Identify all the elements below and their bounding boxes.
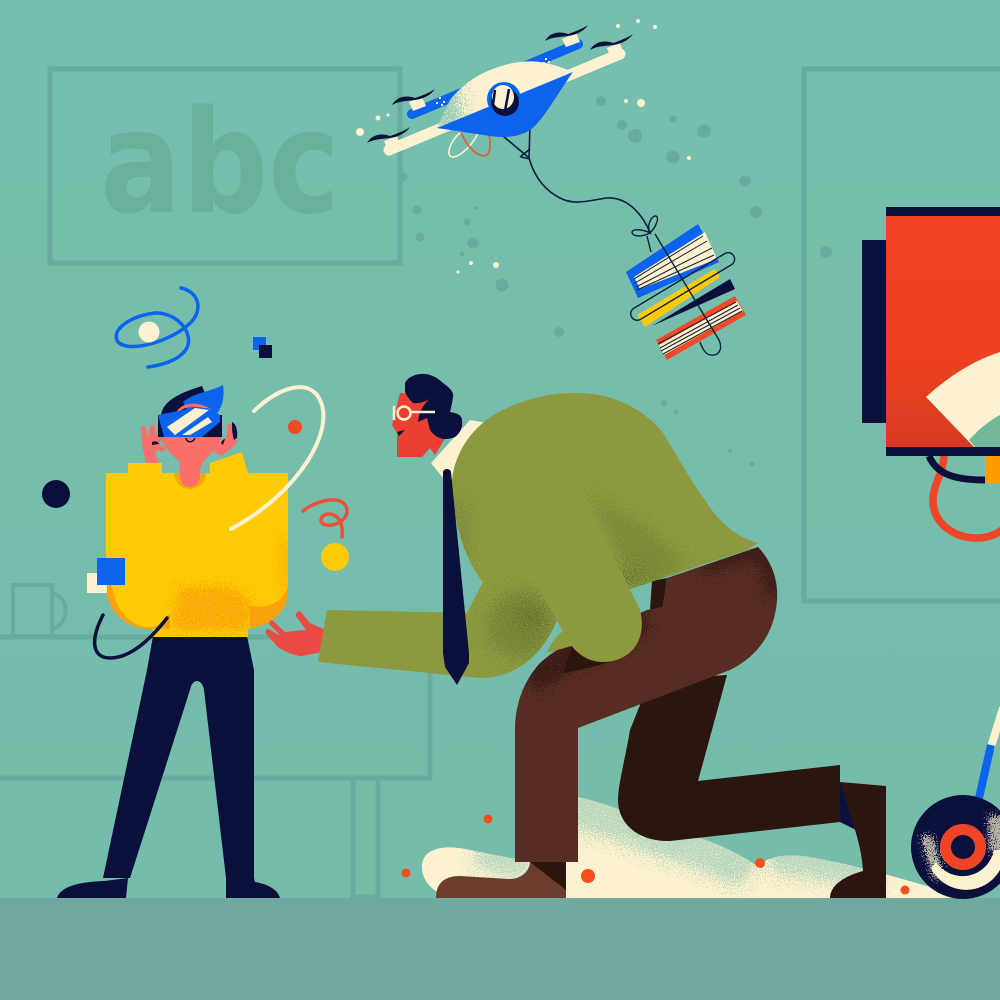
drone bbox=[367, 25, 650, 232]
orbit line bbox=[116, 288, 198, 367]
background speckles bbox=[398, 96, 832, 467]
hair blue bbox=[183, 385, 224, 416]
green wedge bbox=[969, 415, 1000, 447]
red dot bbox=[288, 420, 302, 434]
smile bbox=[186, 438, 195, 442]
trousers bbox=[103, 636, 254, 878]
yellow book bbox=[637, 269, 720, 327]
wheel stem bbox=[979, 708, 1000, 798]
camera lens bbox=[492, 85, 514, 109]
side panel bbox=[862, 240, 886, 423]
top bar bbox=[886, 207, 1000, 216]
VR boy bbox=[57, 385, 292, 898]
camera ring bbox=[487, 82, 521, 116]
hip strip bbox=[650, 578, 667, 610]
cream specks on blue arm bbox=[436, 58, 550, 106]
wheel hub bbox=[946, 830, 980, 864]
wheel cream grain bbox=[921, 816, 1000, 878]
visor stripes bbox=[167, 408, 212, 435]
shirt bbox=[106, 452, 288, 627]
red book bbox=[656, 296, 746, 360]
VR headset bbox=[158, 415, 222, 437]
front shoe bbox=[436, 862, 566, 898]
floor bbox=[0, 898, 1000, 1000]
shirt hem and centre bbox=[153, 575, 250, 637]
drone loops bbox=[449, 132, 490, 157]
mouth bbox=[397, 430, 405, 436]
front trousers bbox=[515, 547, 777, 862]
back foot bbox=[830, 782, 886, 898]
floating eye scribble bbox=[116, 288, 198, 367]
drone string and knots bbox=[503, 125, 650, 232]
back sock bbox=[840, 782, 856, 830]
board text: abc: abc bbox=[100, 79, 340, 246]
face bbox=[392, 393, 450, 457]
bow bbox=[632, 216, 657, 236]
red book lines bbox=[658, 302, 742, 354]
wheel cream crescent bbox=[931, 850, 1000, 890]
page lines bbox=[634, 236, 714, 290]
wheel bbox=[911, 795, 1000, 899]
horizontal string loop bbox=[628, 250, 737, 323]
shirt collar bbox=[431, 420, 487, 480]
red scribble bbox=[303, 500, 347, 537]
orange box bbox=[985, 456, 1000, 484]
sweater torso and forearm bbox=[318, 393, 758, 678]
front arm bbox=[389, 54, 620, 150]
navy book bbox=[652, 279, 735, 326]
rear arm bbox=[412, 44, 578, 114]
eye ball bbox=[138, 322, 160, 342]
cream sand mound bbox=[422, 797, 965, 898]
shirt orange underlay bbox=[106, 560, 288, 629]
back leg bbox=[618, 675, 840, 841]
navy cable bbox=[929, 456, 985, 480]
collar bbox=[174, 473, 206, 489]
sweater grain bbox=[452, 490, 690, 659]
pink headband bbox=[177, 404, 211, 411]
motors bbox=[384, 33, 624, 152]
blue book bbox=[626, 224, 719, 298]
hair bbox=[405, 374, 462, 439]
right hand bbox=[214, 424, 237, 456]
bottom bar bbox=[886, 447, 1000, 456]
drone body blue bbox=[437, 72, 573, 137]
red book pages bbox=[659, 301, 743, 355]
right shoe bbox=[226, 878, 280, 898]
shirt grain bbox=[172, 540, 292, 630]
visor bbox=[158, 408, 220, 437]
bent man bbox=[266, 374, 886, 898]
yellow dot bbox=[321, 543, 349, 571]
desk outline bbox=[0, 637, 430, 897]
tie bbox=[443, 469, 469, 685]
screen bbox=[886, 215, 1000, 448]
cream wedge bbox=[926, 352, 1000, 447]
cream body teal grain bbox=[430, 80, 462, 130]
floating pixels bbox=[253, 337, 272, 358]
lens bars bbox=[493, 89, 509, 111]
trousers grain bbox=[530, 548, 773, 680]
cable bbox=[95, 615, 167, 658]
vertical string strands bbox=[647, 234, 721, 355]
cream speckles bbox=[356, 19, 691, 274]
front shoe dark bbox=[530, 862, 566, 898]
pages bbox=[634, 232, 717, 289]
sweater sliver bbox=[547, 628, 575, 653]
stack of books tied with string bbox=[626, 216, 746, 360]
left shoe bbox=[57, 878, 128, 898]
navy dot bbox=[42, 480, 70, 508]
orange dots bbox=[402, 814, 910, 894]
sweater arm bbox=[490, 470, 642, 662]
glasses bbox=[394, 406, 435, 420]
hair dark bbox=[161, 386, 214, 415]
cream arc line bbox=[231, 387, 323, 529]
neck and chin bbox=[160, 436, 222, 487]
finger shadows bbox=[152, 422, 237, 445]
left hand bbox=[141, 425, 165, 463]
cream and blue squares bbox=[87, 558, 125, 593]
thigh shadow bbox=[563, 640, 617, 673]
red cable bbox=[933, 456, 1000, 538]
hand bbox=[266, 611, 326, 656]
drone body cream bbox=[437, 61, 573, 130]
blue lower band bbox=[638, 259, 719, 298]
wall frame right bbox=[804, 69, 1000, 601]
mound grain bbox=[478, 797, 880, 875]
lens shadow bbox=[491, 88, 519, 116]
mug outline bbox=[13, 585, 66, 636]
wall board with abc bbox=[50, 69, 400, 263]
screen robot bbox=[862, 207, 1000, 899]
propellers bbox=[367, 25, 633, 143]
